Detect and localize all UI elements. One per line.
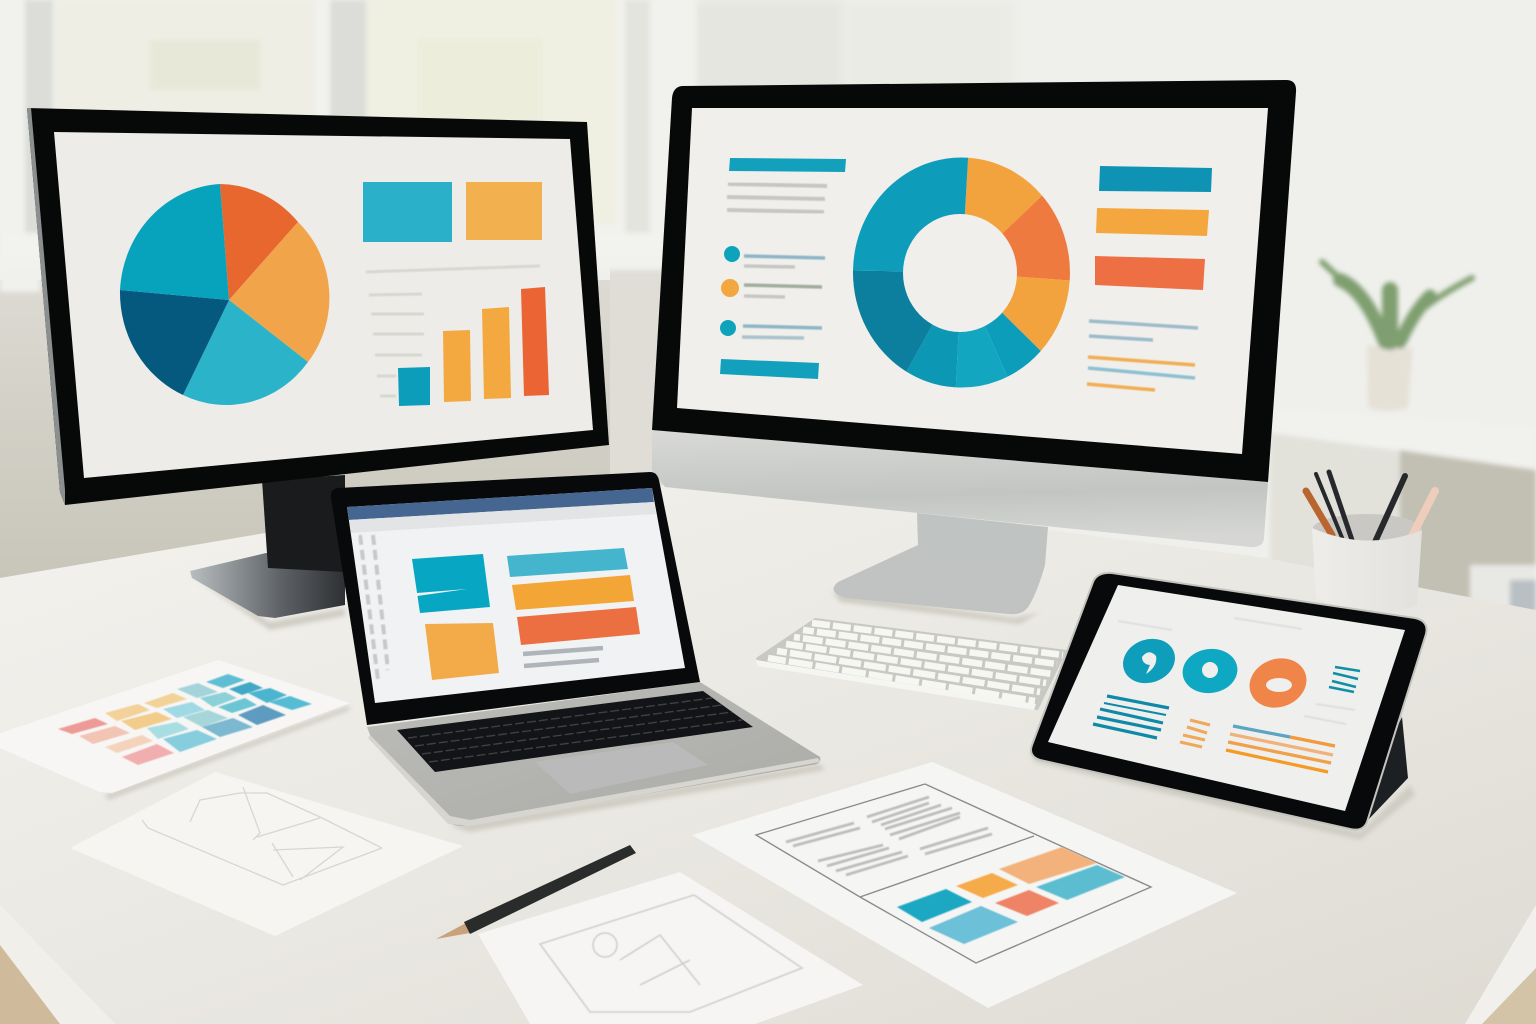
bar chart xyxy=(398,287,549,406)
keyboard deck xyxy=(397,691,753,772)
text lines right xyxy=(1087,321,1198,390)
silver chin xyxy=(652,430,1268,547)
desk side right xyxy=(1465,905,1536,1024)
desk side left xyxy=(0,905,115,1024)
cup interior xyxy=(1312,514,1422,546)
ring icons xyxy=(1117,632,1313,715)
monitor stand xyxy=(834,513,1048,614)
cup xyxy=(1312,528,1422,612)
left monitor xyxy=(27,108,609,618)
paper: wireframe right xyxy=(692,762,1237,1008)
paper: sketch left xyxy=(70,772,463,936)
pens xyxy=(1306,472,1435,542)
orange short lines xyxy=(1180,720,1210,747)
laptop lid xyxy=(331,472,700,725)
paper: colour swatches xyxy=(0,660,350,793)
plant pot xyxy=(1367,345,1413,411)
wireframe outline xyxy=(756,784,1151,963)
floor bottom right xyxy=(1482,968,1536,1024)
paper: sketch bottom xyxy=(478,872,863,1024)
multicolour lines xyxy=(1226,726,1335,772)
wireframe text lines xyxy=(786,797,992,875)
donut chart xyxy=(853,157,1070,388)
monitor bezel xyxy=(652,80,1296,482)
teal tile xyxy=(363,182,452,242)
front lip xyxy=(368,735,820,826)
monitor edge xyxy=(27,108,65,505)
monitor screen xyxy=(677,108,1268,454)
right monitor xyxy=(652,80,1296,614)
icon lines xyxy=(1329,667,1360,692)
monitor bezel xyxy=(27,108,609,505)
orange tile xyxy=(466,182,542,240)
keyboard xyxy=(756,618,1067,710)
faint text lines xyxy=(1118,618,1355,724)
pen holder xyxy=(1306,472,1435,612)
stacked bars right xyxy=(1095,166,1212,290)
tablet body xyxy=(1031,573,1427,830)
pen xyxy=(436,845,636,939)
pie chart xyxy=(120,184,329,405)
floor bottom left xyxy=(0,945,60,1024)
text lines xyxy=(366,266,540,396)
tablet stand xyxy=(1360,717,1408,820)
trackpad xyxy=(535,742,708,794)
orange tile xyxy=(425,623,499,680)
laptop xyxy=(331,472,820,826)
teal tile xyxy=(412,554,490,613)
monitor screen xyxy=(54,132,593,478)
tablet screen xyxy=(1048,585,1405,811)
monitor stand xyxy=(190,475,345,618)
laptop screen xyxy=(347,488,685,703)
spreadsheet column xyxy=(360,535,388,680)
text lines xyxy=(523,648,603,666)
soft shadows xyxy=(105,575,1415,840)
wireframe colour tiles xyxy=(897,847,1125,944)
plant xyxy=(1322,262,1472,411)
laptop base xyxy=(367,682,820,826)
tablet xyxy=(1031,573,1427,830)
window xyxy=(0,0,695,292)
back shelf xyxy=(1270,408,1536,620)
app toolbar xyxy=(347,488,654,520)
teal text lines xyxy=(1093,696,1169,738)
desk surface xyxy=(0,485,1536,1024)
bar rows xyxy=(507,548,640,645)
text list left xyxy=(720,158,846,379)
